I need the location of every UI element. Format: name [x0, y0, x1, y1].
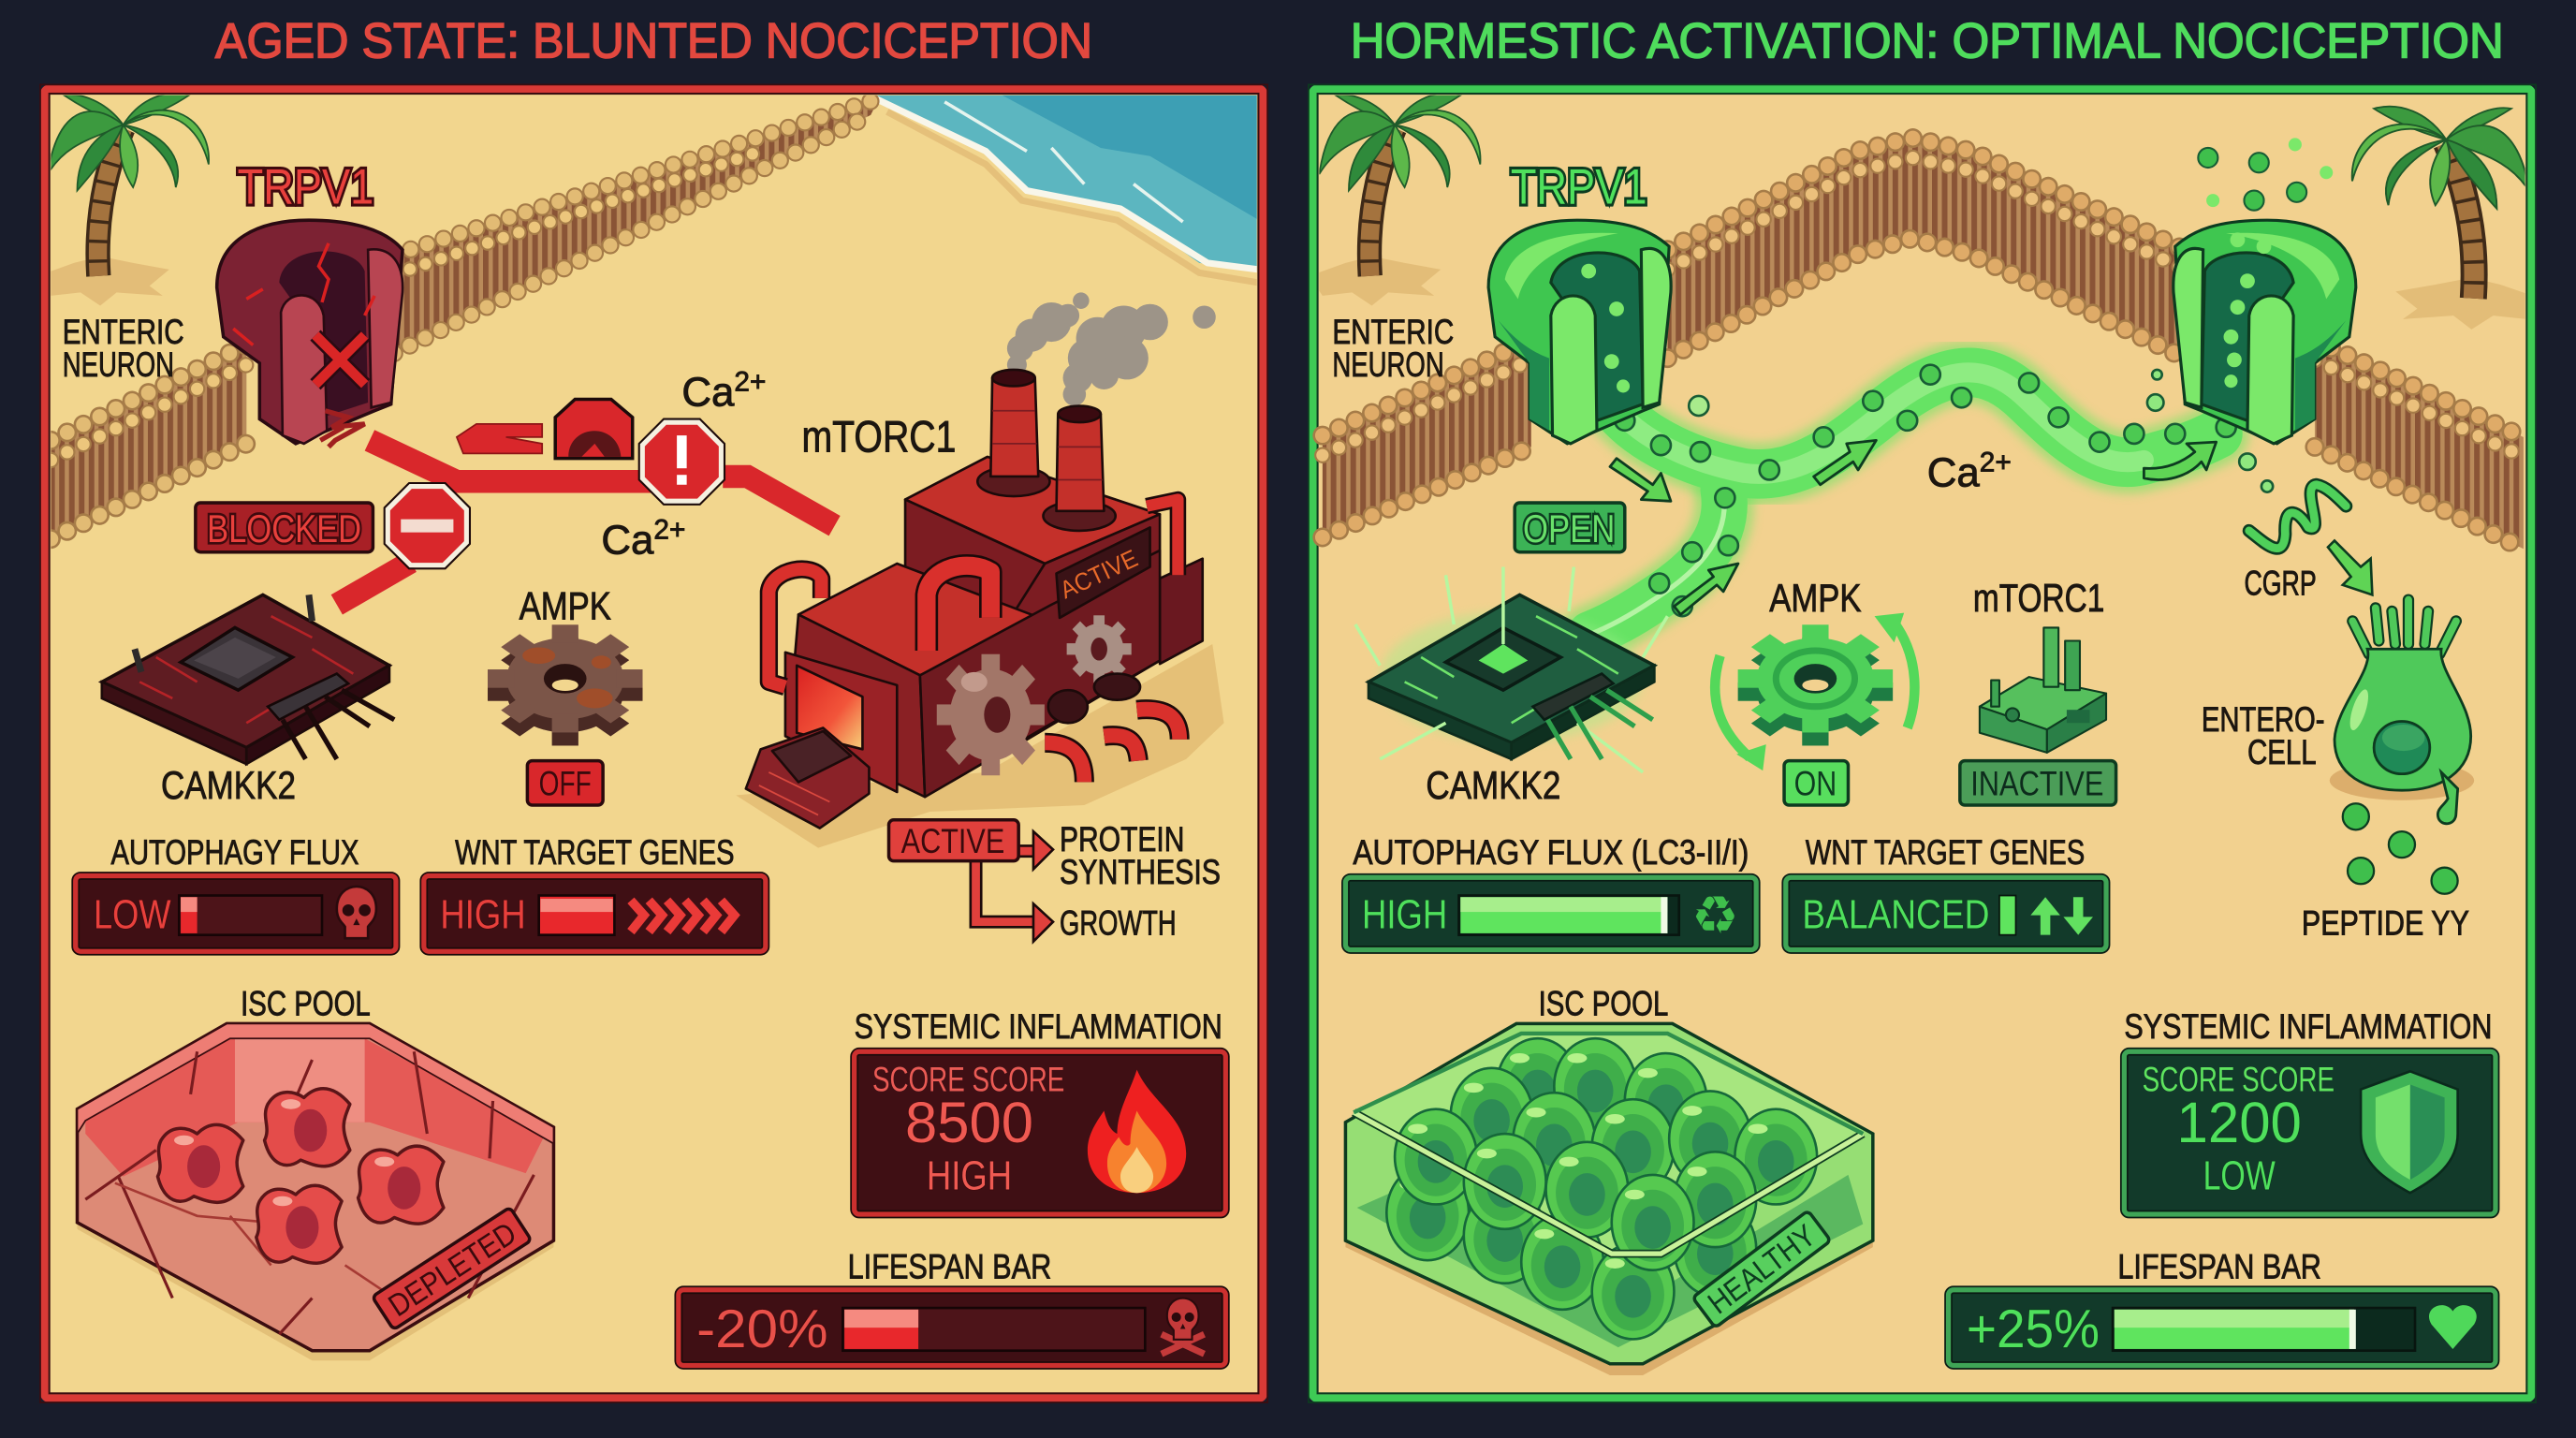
- active plate: [1057, 527, 1150, 618]
- TRPV1 channel open right: [2174, 220, 2356, 444]
- membrane fence: upper right: [394, 98, 879, 353]
- ocean: [875, 95, 1262, 283]
- gear: AMPK on: [1715, 613, 1914, 770]
- blocked badge: BLOCKED: [207, 506, 361, 550]
- wnt target genes meter: WNT TARGET GENES: [455, 833, 735, 872]
- systemic inflammation panel: SYSTEMIC INFLAMMATION: [2124, 1007, 2492, 1046]
- arch pipe: [927, 565, 990, 651]
- lifespan bar: LIFESPAN BAR: [848, 1247, 1051, 1285]
- wnt target genes meter: BALANCED: [1802, 892, 1989, 938]
- enteric neuron label: ENTERIC: [1332, 313, 1454, 351]
- AMPK label: AMPK: [1769, 576, 1862, 620]
- peptide YY label: PEPTIDE YY: [2302, 904, 2469, 943]
- label: calcium lower: 2+: [653, 515, 685, 546]
- label: calcium upper: 2+: [734, 367, 766, 398]
- back block: [905, 457, 1160, 564]
- broken arrow fragment: [457, 424, 542, 453]
- furnace: [785, 653, 897, 792]
- panel frame: [1312, 89, 2532, 1399]
- palm tree left: [1310, 94, 1481, 305]
- palm tree right: [2352, 107, 2540, 330]
- wnt target genes meter: [424, 833, 766, 951]
- enteric neuron label: ENTERIC: [63, 313, 184, 351]
- autophagy flux meter: [1345, 833, 1756, 949]
- wnt target genes meter: [1786, 833, 2106, 949]
- down arrow: [2063, 897, 2093, 935]
- depleted tag: DEPLETED: [383, 1216, 522, 1324]
- CAMKK2 chip active: [1355, 567, 1667, 772]
- lifespan bar: +25%: [1967, 1299, 2100, 1359]
- mTORC1 label: mTORC1: [801, 413, 956, 462]
- palm tree: [37, 94, 209, 305]
- label: calcium upper: Ca: [681, 370, 734, 416]
- membrane fence: lower left: [51, 345, 246, 540]
- enteric neuron label: NEURON: [63, 345, 174, 384]
- TRPV1 channel blocked: [217, 220, 402, 447]
- systemic inflammation panel: [855, 1007, 1225, 1214]
- systemic inflammation panel: SCORE SCORE: [872, 1060, 1064, 1098]
- enteric neuron label: [63, 313, 184, 384]
- inactive badge: INACTIVE: [1970, 764, 2103, 802]
- CAMKK2 chip damaged: [102, 594, 394, 764]
- systemic inflammation panel: 1200: [2177, 1091, 2302, 1155]
- broken sign fragment: [555, 399, 633, 459]
- systemic inflammation panel: SYSTEMIC INFLAMMATION: [855, 1007, 1222, 1046]
- CGRP label: CGRP: [2244, 564, 2317, 602]
- enteroendocrine cell: [2330, 600, 2474, 824]
- systemic inflammation panel: [2124, 1007, 2496, 1214]
- ISC pool label: ISC POOL: [241, 985, 371, 1023]
- active output tree: ACTIVE: [901, 822, 1004, 860]
- CAMKK2 label: CAMKK2: [161, 763, 296, 807]
- AMPK label: AMPK: [520, 584, 611, 628]
- active output tree: [889, 820, 1053, 942]
- systemic inflammation panel: SCORE SCORE: [2143, 1060, 2334, 1098]
- ISC pool tray healthy: [1345, 1023, 1873, 1375]
- released particles: [2198, 138, 2333, 211]
- flow arrows: [1610, 440, 2217, 614]
- panel: aged state: [37, 84, 1267, 1402]
- mTORC1 factory active: ACTIVE: [1056, 544, 1142, 604]
- mTORC1 label: mTORC1: [1973, 576, 2104, 620]
- title: hormetic activation: HORMESTIC ACTIVATION: OPTIMAL NOCICEPTION: [1351, 13, 2504, 68]
- chimney 1: [977, 466, 1050, 496]
- autophagy flux meter: LOW: [94, 892, 171, 938]
- off badge: [527, 761, 603, 805]
- peptide YY dots: [2343, 803, 2458, 894]
- label: calcium: Ca: [1927, 450, 1980, 496]
- heart icon: [2429, 1305, 2477, 1349]
- autophagy flux meter: HIGH: [1362, 892, 1447, 938]
- mTORC1 factory active: [736, 292, 1224, 848]
- membrane fence right: [2315, 340, 2524, 549]
- wnt target genes meter: WNT TARGET GENES: [1806, 833, 2085, 872]
- autophagy flux meter: AUTOPHAGY FLUX (LC3-II/I): [1353, 833, 1749, 872]
- lifespan bar: LIFESPAN BAR: [2117, 1247, 2321, 1285]
- ISC pool label: ISC POOL: [1539, 985, 1668, 1023]
- lifespan bar: [1949, 1247, 2496, 1365]
- on badge: ON: [1794, 764, 1837, 802]
- panel: hormetic activation: [1309, 84, 2540, 1402]
- membrane fence left: [1323, 340, 1531, 537]
- enterocell label: [2202, 700, 2324, 771]
- stop sign: [385, 483, 470, 568]
- flame icon: [1088, 1070, 1186, 1193]
- systemic inflammation panel: HIGH: [927, 1153, 1012, 1199]
- calcium flow tube: [1590, 373, 2217, 634]
- blocked red pathway: [337, 440, 835, 605]
- steps: [746, 728, 869, 829]
- lifespan bar: -20%: [696, 1299, 828, 1359]
- large gear: [937, 654, 1045, 775]
- recycle icon: ♻: [1691, 886, 1738, 946]
- front block: [798, 564, 1040, 675]
- label: calcium lower: Ca: [601, 517, 653, 563]
- enteric neuron label: [1332, 313, 1454, 384]
- open badge: OPEN: [1523, 506, 1615, 550]
- smoke: [1007, 292, 1216, 406]
- output labels: PROTEIN: [1060, 820, 1184, 858]
- output labels: SYNTHESIS: [1060, 853, 1221, 891]
- output labels: GROWTH: [1060, 904, 1177, 943]
- CGRP peptide: [2249, 485, 2346, 549]
- off badge: OFF: [539, 764, 592, 802]
- CAMKK2 label: CAMKK2: [1426, 763, 1560, 807]
- enterocell label: ENTERO-: [2202, 700, 2324, 739]
- TRPV1 label: TRPV1: [238, 160, 373, 215]
- bottom pipes: [1045, 742, 1084, 782]
- mTORC1 factory inactive: [1980, 627, 2106, 753]
- label: calcium: 2+: [1980, 448, 2012, 478]
- small gear: [1067, 615, 1132, 682]
- output labels: [1060, 820, 1221, 943]
- rusty gear: AMPK off: [488, 624, 643, 745]
- chimney 2: [1043, 501, 1116, 531]
- enteric neuron label: NEURON: [1332, 345, 1444, 384]
- panel frame: [44, 89, 1264, 1399]
- autophagy flux meter: AUTOPHAGY FLUX: [110, 833, 359, 872]
- right pipe: [1147, 500, 1178, 575]
- lifespan bar: [679, 1247, 1225, 1365]
- shield icon: [2361, 1071, 2458, 1193]
- calcium beads: [1615, 365, 2273, 616]
- TRPV1 label: TRPV1: [1511, 160, 1647, 215]
- skull and crossbones: [1162, 1299, 1204, 1354]
- membrane fence arch: [1667, 138, 2185, 359]
- autophagy flux meter: [76, 833, 396, 951]
- CGRP arrow: [2328, 540, 2372, 594]
- on badge: [1784, 761, 1848, 805]
- wnt target genes meter: HIGH: [440, 892, 526, 938]
- systemic inflammation panel: 8500: [905, 1091, 1033, 1155]
- title: aged state: AGED STATE: BLUNTED NOCICEPTION: [215, 13, 1092, 68]
- systemic inflammation panel: LOW: [2203, 1153, 2276, 1199]
- TRPV1 channel open left: [1488, 220, 1671, 444]
- warning sign: [639, 419, 724, 505]
- up arrow: [2030, 897, 2060, 935]
- enterocell label: CELL: [2247, 733, 2317, 771]
- left loop pipe: [768, 569, 822, 687]
- healthy tag: HEALTHY: [1702, 1218, 1822, 1321]
- ISC pool tray depleted: [77, 1023, 553, 1360]
